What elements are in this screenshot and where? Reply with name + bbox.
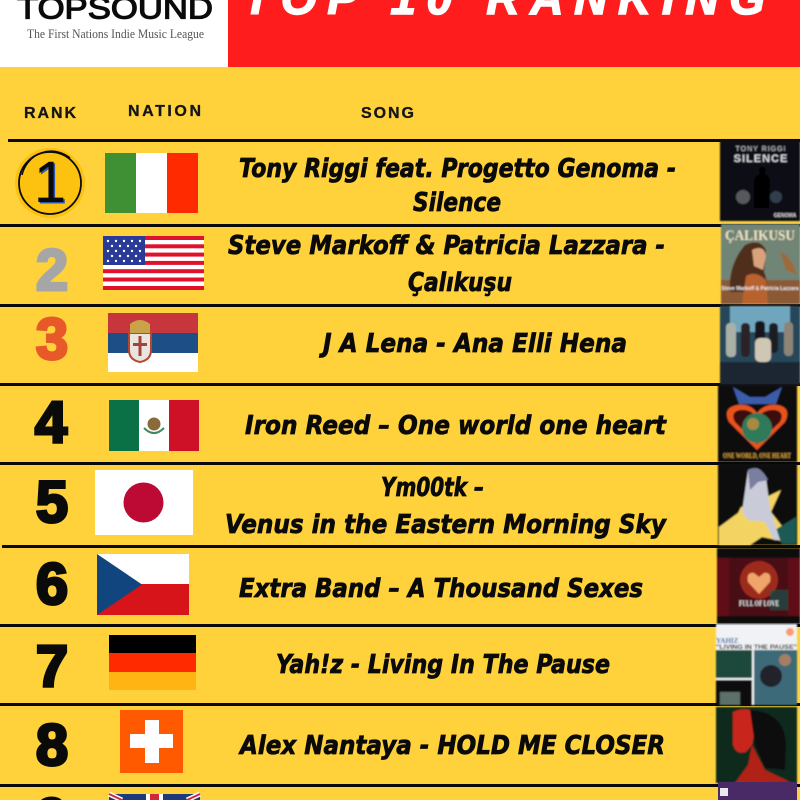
cover 7: Living in the Pause: YAHIZ: [716, 637, 739, 645]
song titles: Venus in the Eastern Morning Sky: [225, 510, 667, 540]
column headers: NATION: [128, 103, 201, 120]
flag: Serbia: [108, 313, 198, 372]
song titles: Alex Nantaya - HOLD ME CLOSER: [238, 731, 665, 761]
cover 5: Venus: [718, 464, 797, 545]
title banner: [228, 0, 800, 67]
column headers: RANK: [24, 105, 76, 122]
cover 9: [718, 782, 797, 800]
song titles: J A Lena - Ana Elli Hena: [319, 329, 627, 359]
song titles: Çalıkuşu: [408, 268, 512, 298]
flag: Czech Republic: [97, 554, 189, 615]
cover 7: Living in the Pause: "LIVING IN THE PAUSE": [716, 645, 797, 651]
song titles: [225, 154, 676, 761]
song titles: Tony Riggi feat. Progetto Genoma -: [239, 154, 676, 184]
logo panel: [0, 0, 228, 67]
column headers: SONG: [361, 105, 414, 122]
rank numbers: 6: [36, 552, 68, 617]
flag: Japan: [95, 470, 193, 535]
rank numbers: 3: [36, 307, 68, 372]
cover 8: Hold Me Closer: [716, 707, 797, 783]
flag: Mexico: [109, 400, 199, 451]
flag: Germany: [109, 635, 196, 690]
cover 6: Full of Love: FULL OF LOVE: [739, 599, 779, 608]
song titles: Yah!z - Living In The Pause: [276, 650, 610, 680]
rank numbers: 7: [36, 634, 68, 699]
rank 1 badge: [15, 148, 85, 218]
cover 3: Ana Elli Hena: [720, 306, 800, 385]
song titles: Silence: [413, 188, 501, 218]
cover 1: Silence: [720, 140, 800, 221]
rank numbers: 2: [36, 238, 68, 303]
song titles: Steve Markoff & Patricia Lazzara -: [228, 231, 665, 261]
rank numbers: 4: [35, 390, 67, 455]
cover 1: Silence: TONY RIGGI: [736, 146, 786, 153]
cover 1: Silence: SILENCE: [734, 153, 788, 165]
flag: Switzerland: [120, 710, 183, 773]
rank numbers: 8: [36, 713, 68, 778]
rank numbers: [35, 238, 68, 800]
flag: United Kingdom: [109, 794, 200, 800]
cover 2: Calikusu: [721, 224, 800, 304]
cover 7: Living in the Pause: [716, 624, 797, 705]
cover 4: One World One Heart: [718, 385, 797, 462]
column headers: [24, 103, 414, 122]
song titles: Ym00tk –: [381, 473, 484, 503]
rank 1 badge: 1: [35, 152, 68, 216]
flag: USA: [103, 236, 204, 290]
cover 1: Silence: GENOMA: [774, 213, 797, 219]
rank numbers: 5: [36, 470, 68, 535]
rank 1 badge: 1: [34, 150, 66, 215]
song titles: Iron Reed – One world one heart: [245, 411, 667, 441]
logo panel: The First Nations Indie Music League: [27, 27, 204, 41]
cover 2: Calikusu: Steve Markoff & Patricia Lazzara: [722, 286, 799, 292]
cover 6: Full of Love: [717, 548, 800, 624]
song titles: Extra Band – A Thousand Sexes: [239, 574, 643, 604]
flag: Italy: [105, 153, 198, 213]
